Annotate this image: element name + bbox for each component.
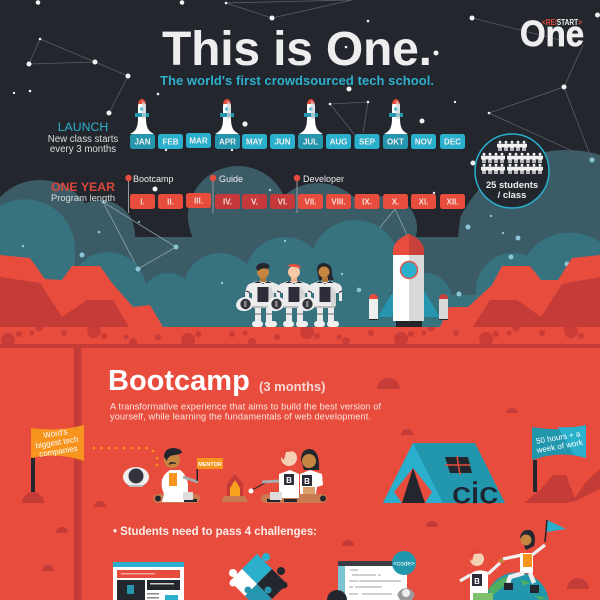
- ground: [0, 324, 600, 600]
- program stage pins: Guide: [219, 174, 243, 184]
- month buttons: FEB: [162, 138, 179, 146]
- bootcamp description: [110, 402, 381, 422]
- students per class circle: 25 students: [486, 179, 538, 190]
- students per class circle: / class: [498, 189, 526, 200]
- flag: biggest tech companies: Word's: [43, 427, 68, 440]
- flag: biggest tech companies: biggest tech: [35, 435, 79, 450]
- dark hills right: [524, 469, 600, 503]
- back clouds: [0, 150, 600, 327]
- challenge icon: puzzle: [229, 553, 288, 600]
- month buttons: [130, 133, 465, 149]
- month number buttons: IV.: [223, 198, 232, 206]
- month buttons: APR: [219, 138, 236, 146]
- one year label: [51, 180, 115, 203]
- right mountains: [440, 255, 600, 327]
- month buttons: MAR: [189, 136, 208, 146]
- challenge icon: climbers on globe: B: [474, 577, 480, 586]
- decorative mounds: [42, 378, 589, 589]
- astronaut: left: [234, 263, 280, 327]
- launch rockets: [130, 99, 408, 134]
- one year label: Program length: [51, 192, 115, 203]
- roasting astronauts: B: [304, 477, 310, 486]
- challenge icon: climbers on globe: [460, 520, 566, 600]
- bootcamp description: yourself, while learning the fundamentals of web development.: [110, 412, 371, 422]
- logo: <RE/START>: [542, 18, 582, 27]
- mentor astronaut: [153, 448, 223, 503]
- tent: cic: [452, 477, 498, 510]
- month number buttons: VII.: [304, 198, 317, 206]
- month buttons: SEP: [359, 138, 376, 146]
- month buttons: JAN: [134, 138, 151, 146]
- students per class circle: [475, 134, 549, 208]
- launch label: every 3 months: [50, 144, 116, 155]
- flag: biggest tech companies: [22, 425, 84, 503]
- month number buttons: IX.: [362, 198, 372, 206]
- challenge icon: code editor: <code>: [393, 560, 415, 568]
- flag: biggest tech companies: companies: [39, 444, 78, 459]
- astronaut: middle: [265, 264, 311, 327]
- month number buttons: [130, 193, 465, 209]
- stars: [13, 0, 600, 194]
- bootcamp heading: (3 months): [259, 379, 325, 394]
- month buttons: JUL: [303, 138, 318, 146]
- flag: 50 hours: 50 hours + a: [535, 429, 582, 446]
- bootcamp description: A transformative experience that aims to build the best version of: [110, 402, 381, 412]
- month buttons: MAY: [246, 138, 264, 146]
- month number buttons: XII.: [446, 198, 459, 206]
- tent: [383, 443, 505, 510]
- month buttons: OKT: [387, 138, 404, 146]
- launch label: New class starts: [48, 134, 118, 145]
- month number buttons: VI.: [278, 198, 287, 206]
- dotted path: [93, 447, 158, 466]
- campfire: [221, 474, 248, 502]
- front clouds: [0, 199, 600, 328]
- bootcamp heading: [108, 365, 325, 397]
- challenges heading: • Students need to pass 4 challenges:: [113, 526, 317, 538]
- month number buttons: VIII.: [331, 198, 346, 206]
- month number buttons: I.: [140, 198, 145, 206]
- program stage pins: [125, 174, 344, 213]
- roasting astronauts: [248, 447, 327, 503]
- month number buttons: X.: [392, 198, 399, 206]
- challenge icon: web page: [113, 562, 184, 600]
- subtitle: The world's first crowdsourced tech school.: [160, 73, 434, 88]
- one year label: ONE YEAR: [51, 180, 115, 194]
- constellation lines: [29, 0, 592, 274]
- month number buttons: III.: [194, 196, 203, 206]
- mentor astronaut: MENTOR: [198, 462, 222, 468]
- month buttons: JUN: [274, 138, 291, 146]
- roasting astronauts: B: [286, 476, 292, 485]
- stars on clouds: [22, 158, 594, 296]
- launch label: [48, 120, 118, 155]
- title: This is One.: [162, 23, 432, 76]
- flag: 50 hours: week of work: [535, 438, 585, 455]
- challenge icon: code editor: [327, 551, 416, 600]
- left mountains: [0, 255, 163, 327]
- helmet on ground: [123, 467, 149, 487]
- month buttons: NOV: [415, 138, 433, 146]
- astronaut: right: [296, 263, 342, 327]
- month number buttons: V.: [251, 198, 258, 206]
- month number buttons: II.: [167, 198, 174, 206]
- month buttons: AUG: [330, 138, 347, 146]
- program stage pins: Developer: [303, 174, 344, 184]
- flag: 50 hours: [532, 425, 586, 492]
- rocket: [369, 234, 448, 327]
- month number buttons: XI.: [419, 198, 428, 206]
- month buttons: DEC: [444, 138, 461, 146]
- launch label: LAUNCH: [58, 120, 108, 134]
- logo: One: [520, 13, 584, 54]
- star on title: [345, 46, 438, 56]
- program stage pins: Bootcamp: [133, 174, 174, 184]
- bootcamp heading: Bootcamp: [108, 365, 250, 397]
